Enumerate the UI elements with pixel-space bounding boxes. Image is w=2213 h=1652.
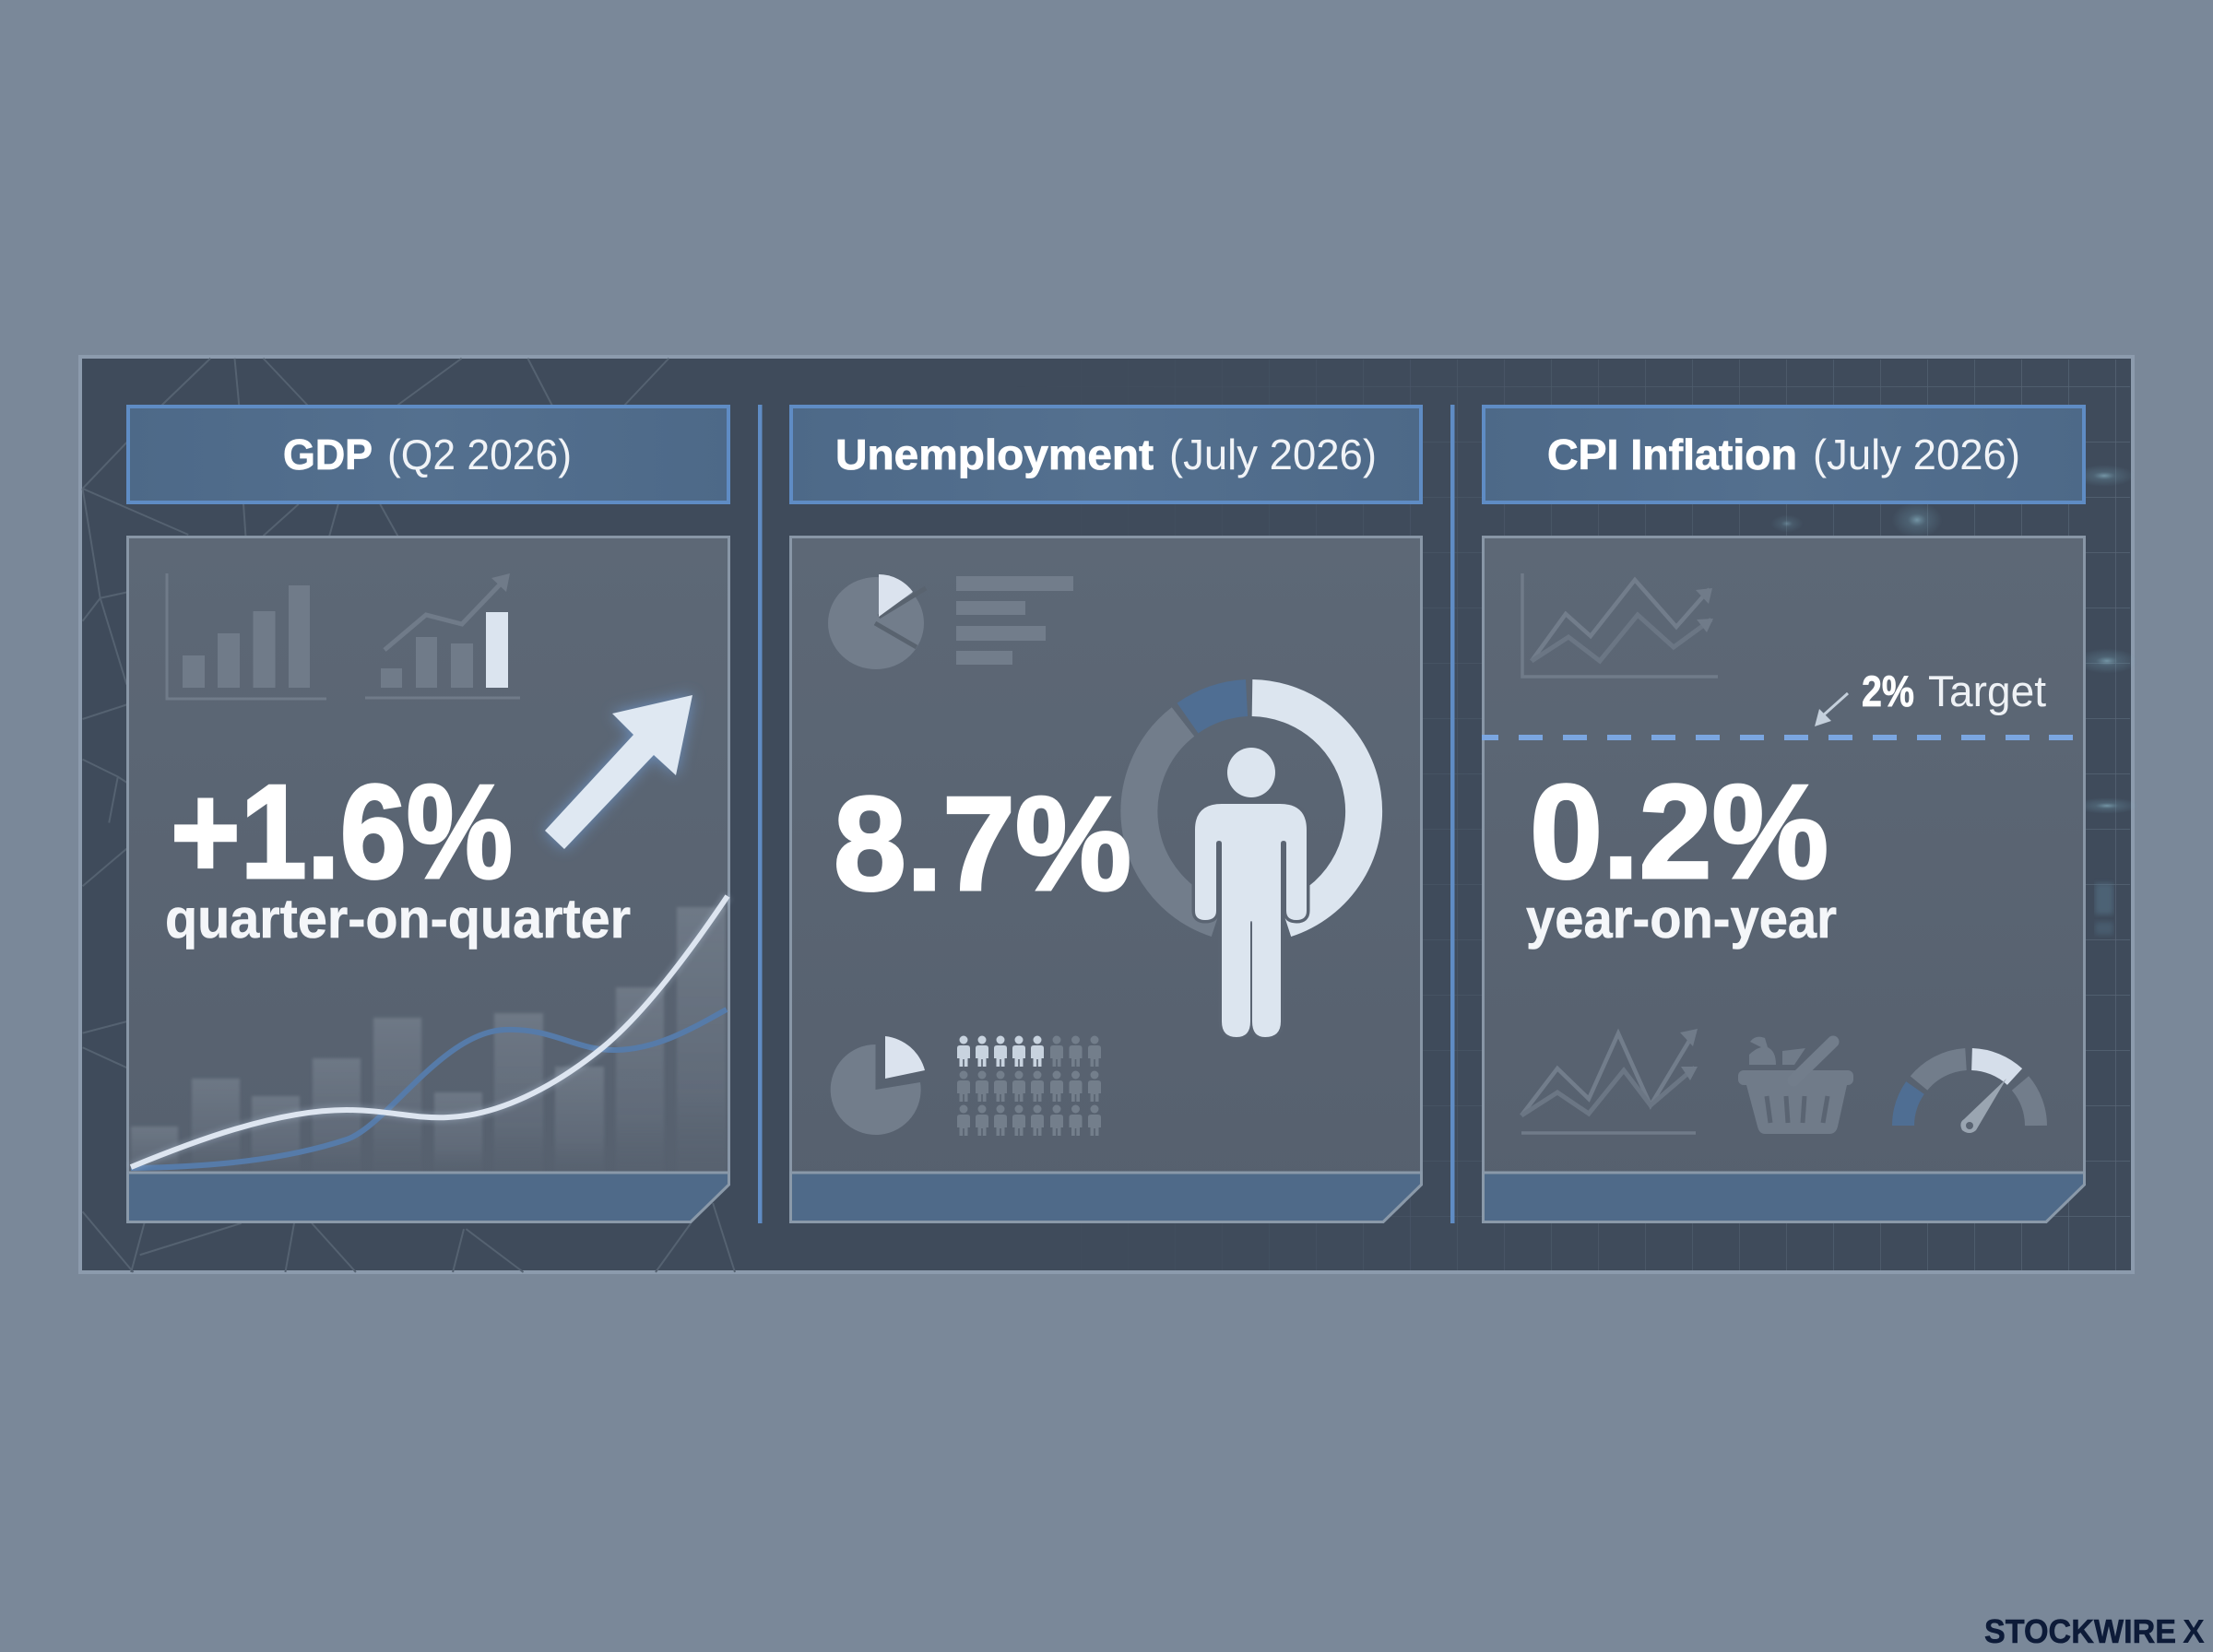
CPI header: (July 2026) — [1813, 431, 2020, 478]
icon: horizontal bars — [956, 576, 1073, 665]
target dashed line — [1482, 733, 2073, 742]
donut ring — [1139, 698, 1364, 919]
brand logo: STOCKWIRE — [1984, 1612, 2176, 1650]
Unemployment header: (July 2026) — [1169, 431, 1377, 478]
Unemployment header: Unemployment — [835, 431, 1154, 478]
panel: GDP — [127, 407, 728, 1222]
CPI header: CPI Inflation — [1547, 431, 1797, 478]
person figure — [1195, 748, 1307, 1037]
GDP card body — [127, 537, 728, 1222]
icon: line chart top — [1522, 573, 1718, 677]
brand logo: X — [2183, 1612, 2205, 1650]
icon: gauge — [1903, 1059, 2036, 1133]
icon: pie chart two — [831, 1036, 925, 1135]
icon: bar chart with rising line — [365, 573, 520, 698]
white growth curve — [131, 896, 728, 1167]
infographic canvas — [78, 355, 2205, 1643]
grid texture, right side — [1332, 360, 2130, 1270]
glowing data points, right side — [1770, 465, 2140, 935]
big up arrow — [545, 695, 692, 849]
GDP header — [128, 407, 728, 502]
footer strip — [127, 1173, 728, 1222]
footer strip — [791, 1173, 1422, 1222]
GDP header: GDP — [283, 431, 373, 478]
CPI card body — [1483, 537, 2084, 1222]
vertical divider 1 — [758, 405, 762, 1223]
Unemployment card body — [791, 537, 1422, 1222]
Unemployment value: 8.7% — [834, 769, 1131, 918]
panel: CPI Inflation — [1482, 407, 2084, 1222]
dashboard frame — [80, 357, 2140, 1272]
CPI value: 0.2% — [1530, 757, 1828, 906]
GDP value: +1.6% — [171, 757, 513, 906]
Unemployment header — [791, 407, 1421, 502]
icon: line chart bottom — [1521, 1029, 1698, 1133]
GDP period label: quarter-on-quarter — [165, 888, 631, 950]
target label: 2% — [1862, 667, 1914, 715]
panel: Unemployment — [791, 407, 1422, 1222]
target label: Target — [1928, 667, 2046, 715]
target label — [1862, 667, 2046, 715]
network lines, left side — [83, 359, 735, 1272]
CPI period label: year-on-year — [1526, 888, 1837, 950]
target pointer arrow — [1815, 693, 1848, 726]
vertical divider 2 — [1450, 405, 1455, 1223]
footer strip — [1483, 1173, 2084, 1222]
icon: pie chart one — [828, 574, 926, 669]
icon: bar chart — [167, 573, 326, 699]
background bars — [131, 907, 726, 1173]
blue trend curve — [131, 1009, 727, 1168]
CPI header — [1484, 407, 2084, 502]
GDP header: (Q2 2026) — [387, 431, 572, 478]
icon: shopping basket — [1738, 1037, 1853, 1134]
icon: people pictogram grid — [957, 1036, 1101, 1136]
